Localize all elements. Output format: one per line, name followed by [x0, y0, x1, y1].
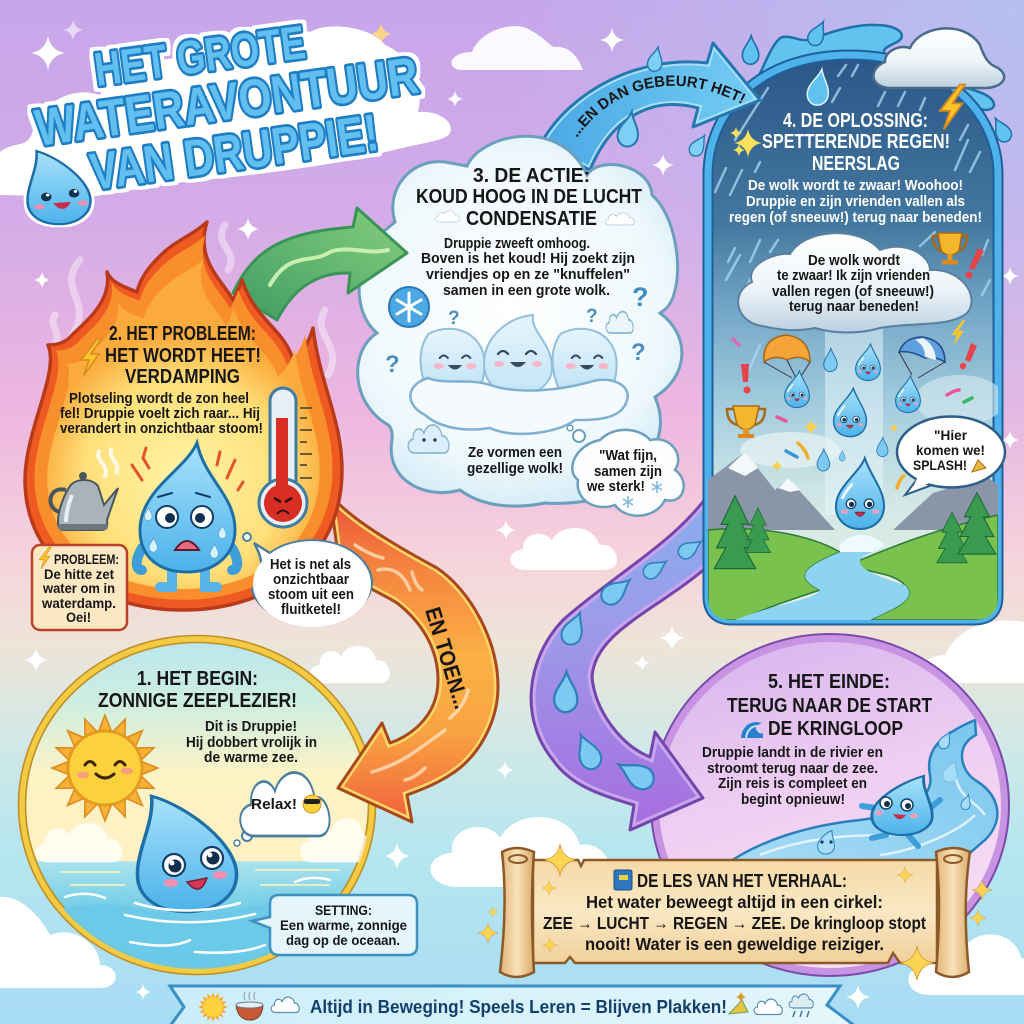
text: panel 3 body: samen in een grote wolk. — [443, 283, 610, 299]
heat squiggles — [132, 448, 243, 490]
arrow: en dan gebeurt het: ...EN DAN GEBEURT HET! — [576, 76, 746, 138]
icon: thermometer — [259, 388, 312, 527]
text: panel 5 body: stroomt terug naar de zee. — [707, 761, 878, 777]
icon: sparkles — [730, 127, 762, 157]
arrow: en toen: EN TOEN... — [420, 604, 475, 712]
heading: panel 2: VERDAMPING — [125, 365, 240, 388]
title: HET GROTE — [91, 15, 308, 96]
panel 1: the beginning — [18, 636, 417, 980]
icon: little cloud face — [408, 425, 449, 453]
speech bubble: fluitketel: Het is net als — [270, 557, 351, 573]
scroll: de les van het verhaal — [478, 844, 992, 980]
text: panel 4 body — [729, 178, 982, 226]
icon: raindrop — [806, 68, 832, 107]
question marks: ? — [385, 351, 400, 378]
text: panel 3 body: Druppie zweeft omhoog. — [444, 236, 590, 252]
icon: trophy top — [933, 233, 967, 264]
text: panel 1 body: de warme zee. — [204, 750, 298, 766]
text: scroll lesson: ZEE → LUCHT → REGEN → ZEE. De kringloop stopt — [543, 913, 926, 933]
text: scroll lesson — [543, 871, 926, 954]
speech cloud: vallen regen (of sneeuw!) — [772, 284, 934, 300]
parachute drop right — [896, 337, 945, 413]
small drops near splash — [742, 18, 1014, 145]
icon: book — [614, 870, 632, 890]
text: panel 4 body: Druppie en zijn vrienden vallen als — [746, 194, 965, 210]
speech bubble: splash: komen we! — [916, 442, 985, 458]
text: panel 5 body: begint opnieuw! — [741, 792, 845, 808]
arrow: en dan gebeurt het — [543, 42, 762, 171]
question marks: ? — [586, 306, 598, 327]
callout: setting — [252, 895, 417, 955]
icon: lightning — [81, 339, 101, 375]
icon: trophy left — [727, 406, 765, 438]
speech bubble: samen sterk — [567, 425, 684, 516]
heading: panel 1: ZONNIGE ZEEPLEZIER! — [98, 689, 297, 712]
speech cloud: te zwaar! Ik zijn vrienden — [777, 268, 930, 284]
speech bubble: fluitketel: stoom uit een — [268, 587, 354, 603]
heading: panel 5: TERUG NAAR DE START — [727, 694, 932, 717]
callout: probleem: waterdamp. — [41, 595, 116, 611]
heading: panel 4: NEERSLAG — [812, 152, 900, 175]
icon: scared droplet — [137, 443, 237, 587]
callout: probleem: water om in — [42, 580, 115, 596]
sea and droplet — [30, 796, 378, 980]
icon: sun — [52, 715, 158, 821]
heading: panel 1: 1. HET BEGIN: — [137, 667, 258, 690]
gold sparkles — [478, 844, 992, 980]
callout: probleem: Oei! — [66, 609, 91, 625]
speech cloud: terug naar beneden! — [789, 299, 919, 315]
landscape — [708, 325, 1005, 620]
speech bubble: splash: "Hier — [934, 427, 968, 443]
storm cloud — [873, 28, 1004, 88]
speech cloud: De wolk wordt — [808, 253, 900, 269]
speech bubble: fluitketel — [243, 533, 372, 627]
river — [725, 720, 997, 870]
question marks: ? — [632, 282, 648, 312]
confetti — [733, 339, 972, 488]
callout: setting: SETTING: — [315, 902, 372, 918]
text: panel 2 body — [60, 391, 263, 437]
speech bubble: fluitketel: fluitketel! — [281, 602, 341, 618]
rain streaks — [715, 65, 990, 372]
heading: panel 4: SPETTERENDE REGEN! — [762, 130, 950, 153]
callout: probleem — [32, 545, 127, 630]
text: panel 2 body: Plotseling wordt de zon heel — [69, 391, 249, 407]
heading: panel 3: CONDENSATIE — [466, 207, 597, 230]
icons: footer left — [198, 992, 299, 1022]
speech bubble: samen sterk: samen zijn — [594, 464, 662, 480]
callout: setting: dag op de oceaan. — [286, 932, 400, 948]
heading: panel 2: 2. HET PROBLEEM: — [109, 322, 256, 345]
title: WATERAVONTUUR — [32, 47, 422, 158]
heading: panel 5: DE KRINGLOOP — [768, 717, 903, 740]
callout: probleem: De hitte zet — [44, 566, 114, 582]
water splash crown — [752, 25, 994, 110]
icon: lightning — [940, 84, 965, 130]
speech bubble: relax: Relax! — [251, 796, 297, 813]
icon: kettle — [50, 448, 118, 530]
falling droplets — [817, 344, 888, 529]
heading: panel 4: 4. DE OPLOSSING: — [783, 109, 928, 132]
question marks: ? — [631, 339, 646, 366]
text: scroll lesson: nooit! Water is een geweldige reiziger. — [585, 934, 884, 954]
speech bubble: splash: SPLASH! — [913, 457, 967, 473]
text: panel 3 body — [421, 236, 635, 299]
text: panel 5 body: Druppie landt in de rivier en — [702, 745, 883, 761]
question marks: ? — [448, 308, 460, 329]
text: panel 4 body: De wolk wordt te zwaar! Woohoo! — [748, 178, 963, 194]
heading: panel 1 — [98, 667, 297, 712]
heading: panel 3: KOUD HOOG IN DE LUCHT — [416, 185, 642, 208]
heading: panel 4 — [762, 109, 950, 175]
parachute drop left — [764, 335, 810, 408]
heading: panel 5 — [727, 670, 932, 740]
text: panel 5 body: Zijn reis is compleet en — [718, 776, 867, 792]
icons: footer right — [729, 992, 813, 1017]
icon: wave — [741, 722, 763, 738]
icon: running droplet — [862, 776, 940, 846]
speech bubble: splash — [897, 416, 1005, 495]
text: cozy cloud note — [467, 445, 563, 477]
heading: panel 3: 3. DE ACTIE: — [473, 164, 590, 187]
icon: bolt small — [951, 320, 965, 346]
text: cozy cloud note: gezellige wolk! — [467, 461, 563, 477]
question marks — [385, 282, 648, 378]
text: panel 3 body: Boven is het koud! Hij zoekt zijn — [421, 251, 635, 267]
title — [32, 15, 422, 202]
title: VAN DRUPPIE! — [87, 104, 382, 202]
callout: setting: Een warme, zonnige — [280, 917, 407, 933]
callout: probleem: PROBLEEM: — [54, 551, 119, 567]
icon: title droplet mascot — [28, 151, 90, 224]
arrow: purple water path — [531, 485, 715, 830]
text: panel 1 body — [186, 719, 317, 766]
text: cozy cloud note: Ze vormen een — [468, 445, 562, 461]
title cloud — [0, 26, 451, 197]
heading: panel 2 — [105, 322, 261, 388]
text: panel 3 body: vriendjes op en ze "knuffelen" — [426, 267, 630, 283]
heading: panel 5: 5. HET EINDE: — [768, 670, 890, 693]
text: panel 1 body: Dit is Druppie! — [205, 719, 297, 735]
speech cloud — [738, 233, 972, 332]
speech bubble: samen sterk: we sterk! — [586, 479, 645, 495]
text: panel 1 body: Hij dobbert vrolijk in — [186, 735, 317, 751]
text: panel 2 body: verandert in onzichtbaar stoom! — [60, 421, 263, 437]
droplet friends on a cloud — [410, 315, 628, 434]
speech bubble: samen sterk: "Wat fijn, — [599, 448, 657, 464]
steam wisps — [53, 225, 333, 375]
footer ribbon — [170, 986, 855, 1024]
text: scroll lesson: DE LES VAN HET VERHAAL: — [637, 871, 847, 891]
speech bubble: relax — [234, 773, 330, 846]
icon: exclamations — [741, 343, 977, 394]
text: footer slogan: Altijd in Beweging! Speels Leren = Blijven Plakken! — [310, 997, 727, 1017]
panel 2: the problem flame — [25, 222, 342, 610]
text: panel 5 body — [702, 745, 883, 808]
text: panel 4 body: regen (of sneeuw!) terug naar beneden! — [729, 210, 982, 226]
icon: mini cloud — [606, 312, 633, 333]
text: panel 2 body: fel! Druppie voelt zich raar... Hij — [60, 406, 260, 422]
icon: small clouds — [435, 211, 634, 225]
arrow: green to panel 3 — [233, 208, 407, 320]
icon: snowflake badge — [389, 287, 429, 327]
text: scroll lesson: Het water beweegt altijd in een cirkel: — [586, 892, 883, 912]
panel 4: the solution — [708, 18, 1014, 620]
heading: panel 3 — [416, 164, 642, 230]
heading: panel 2: HET WORDT HEET! — [105, 344, 261, 367]
speech bubble: fluitketel: onzichtbaar — [273, 572, 349, 588]
arrow: en toen — [330, 495, 498, 822]
panel 3: condensation cloud — [358, 136, 684, 516]
panel 5: the end — [651, 634, 1009, 976]
icon: exclamation — [966, 248, 984, 278]
